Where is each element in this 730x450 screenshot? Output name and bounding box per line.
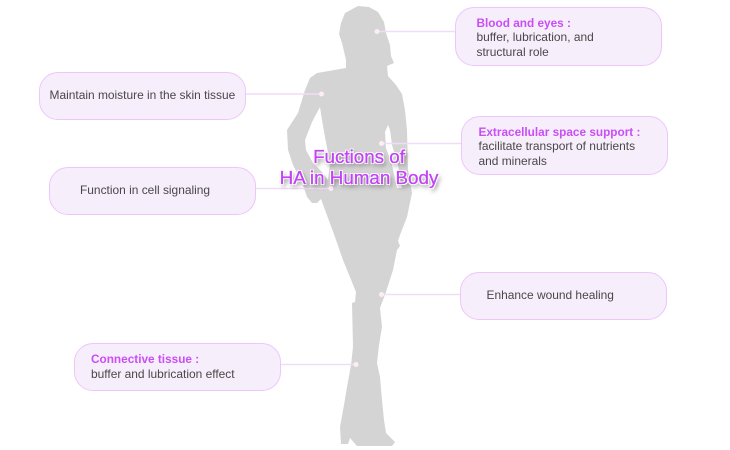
callout: extracellular space support: Extracellular space support : [478, 124, 640, 138]
connector: skin moisture [245, 92, 324, 96]
connector: connective tissue [280, 362, 358, 367]
callout: connective tissue [74, 343, 281, 391]
connector: cell signaling [255, 186, 334, 191]
connector: extracellular space [379, 141, 462, 146]
title: Fuctions of [313, 146, 405, 167]
callout: connective tissue: buffer and lubrication effect [91, 366, 235, 380]
callout: blood and eyes: structural role [476, 44, 549, 58]
callout: cell signaling: Function in cell signaling [80, 183, 210, 197]
icon: female silhouette [287, 6, 412, 446]
callout: connective tissue: Connective tissue : [91, 352, 199, 366]
title: HA in Human Body [280, 167, 438, 188]
callout: cell signaling [49, 167, 256, 215]
callout: extracellular space support: facilitate transport of nutrients [478, 139, 635, 153]
connector: blood and eyes [374, 29, 456, 34]
callout: wound healing: Enhance wound healing [486, 288, 614, 302]
callout: extracellular space support: and minerals [478, 154, 547, 168]
title [280, 146, 442, 193]
callout: blood and eyes: Blood and eyes : [476, 16, 571, 30]
callout: blood and eyes: buffer, lubrication, and [476, 30, 594, 44]
callout: maintain moisture [39, 72, 246, 120]
connector: wound healing [379, 292, 461, 297]
callout: maintain moisture: Maintain moisture in the skin tissue [50, 88, 235, 102]
callout: extracellular space support [461, 116, 668, 175]
callout: wound healing [460, 272, 667, 320]
callout: blood and eyes [455, 7, 662, 66]
